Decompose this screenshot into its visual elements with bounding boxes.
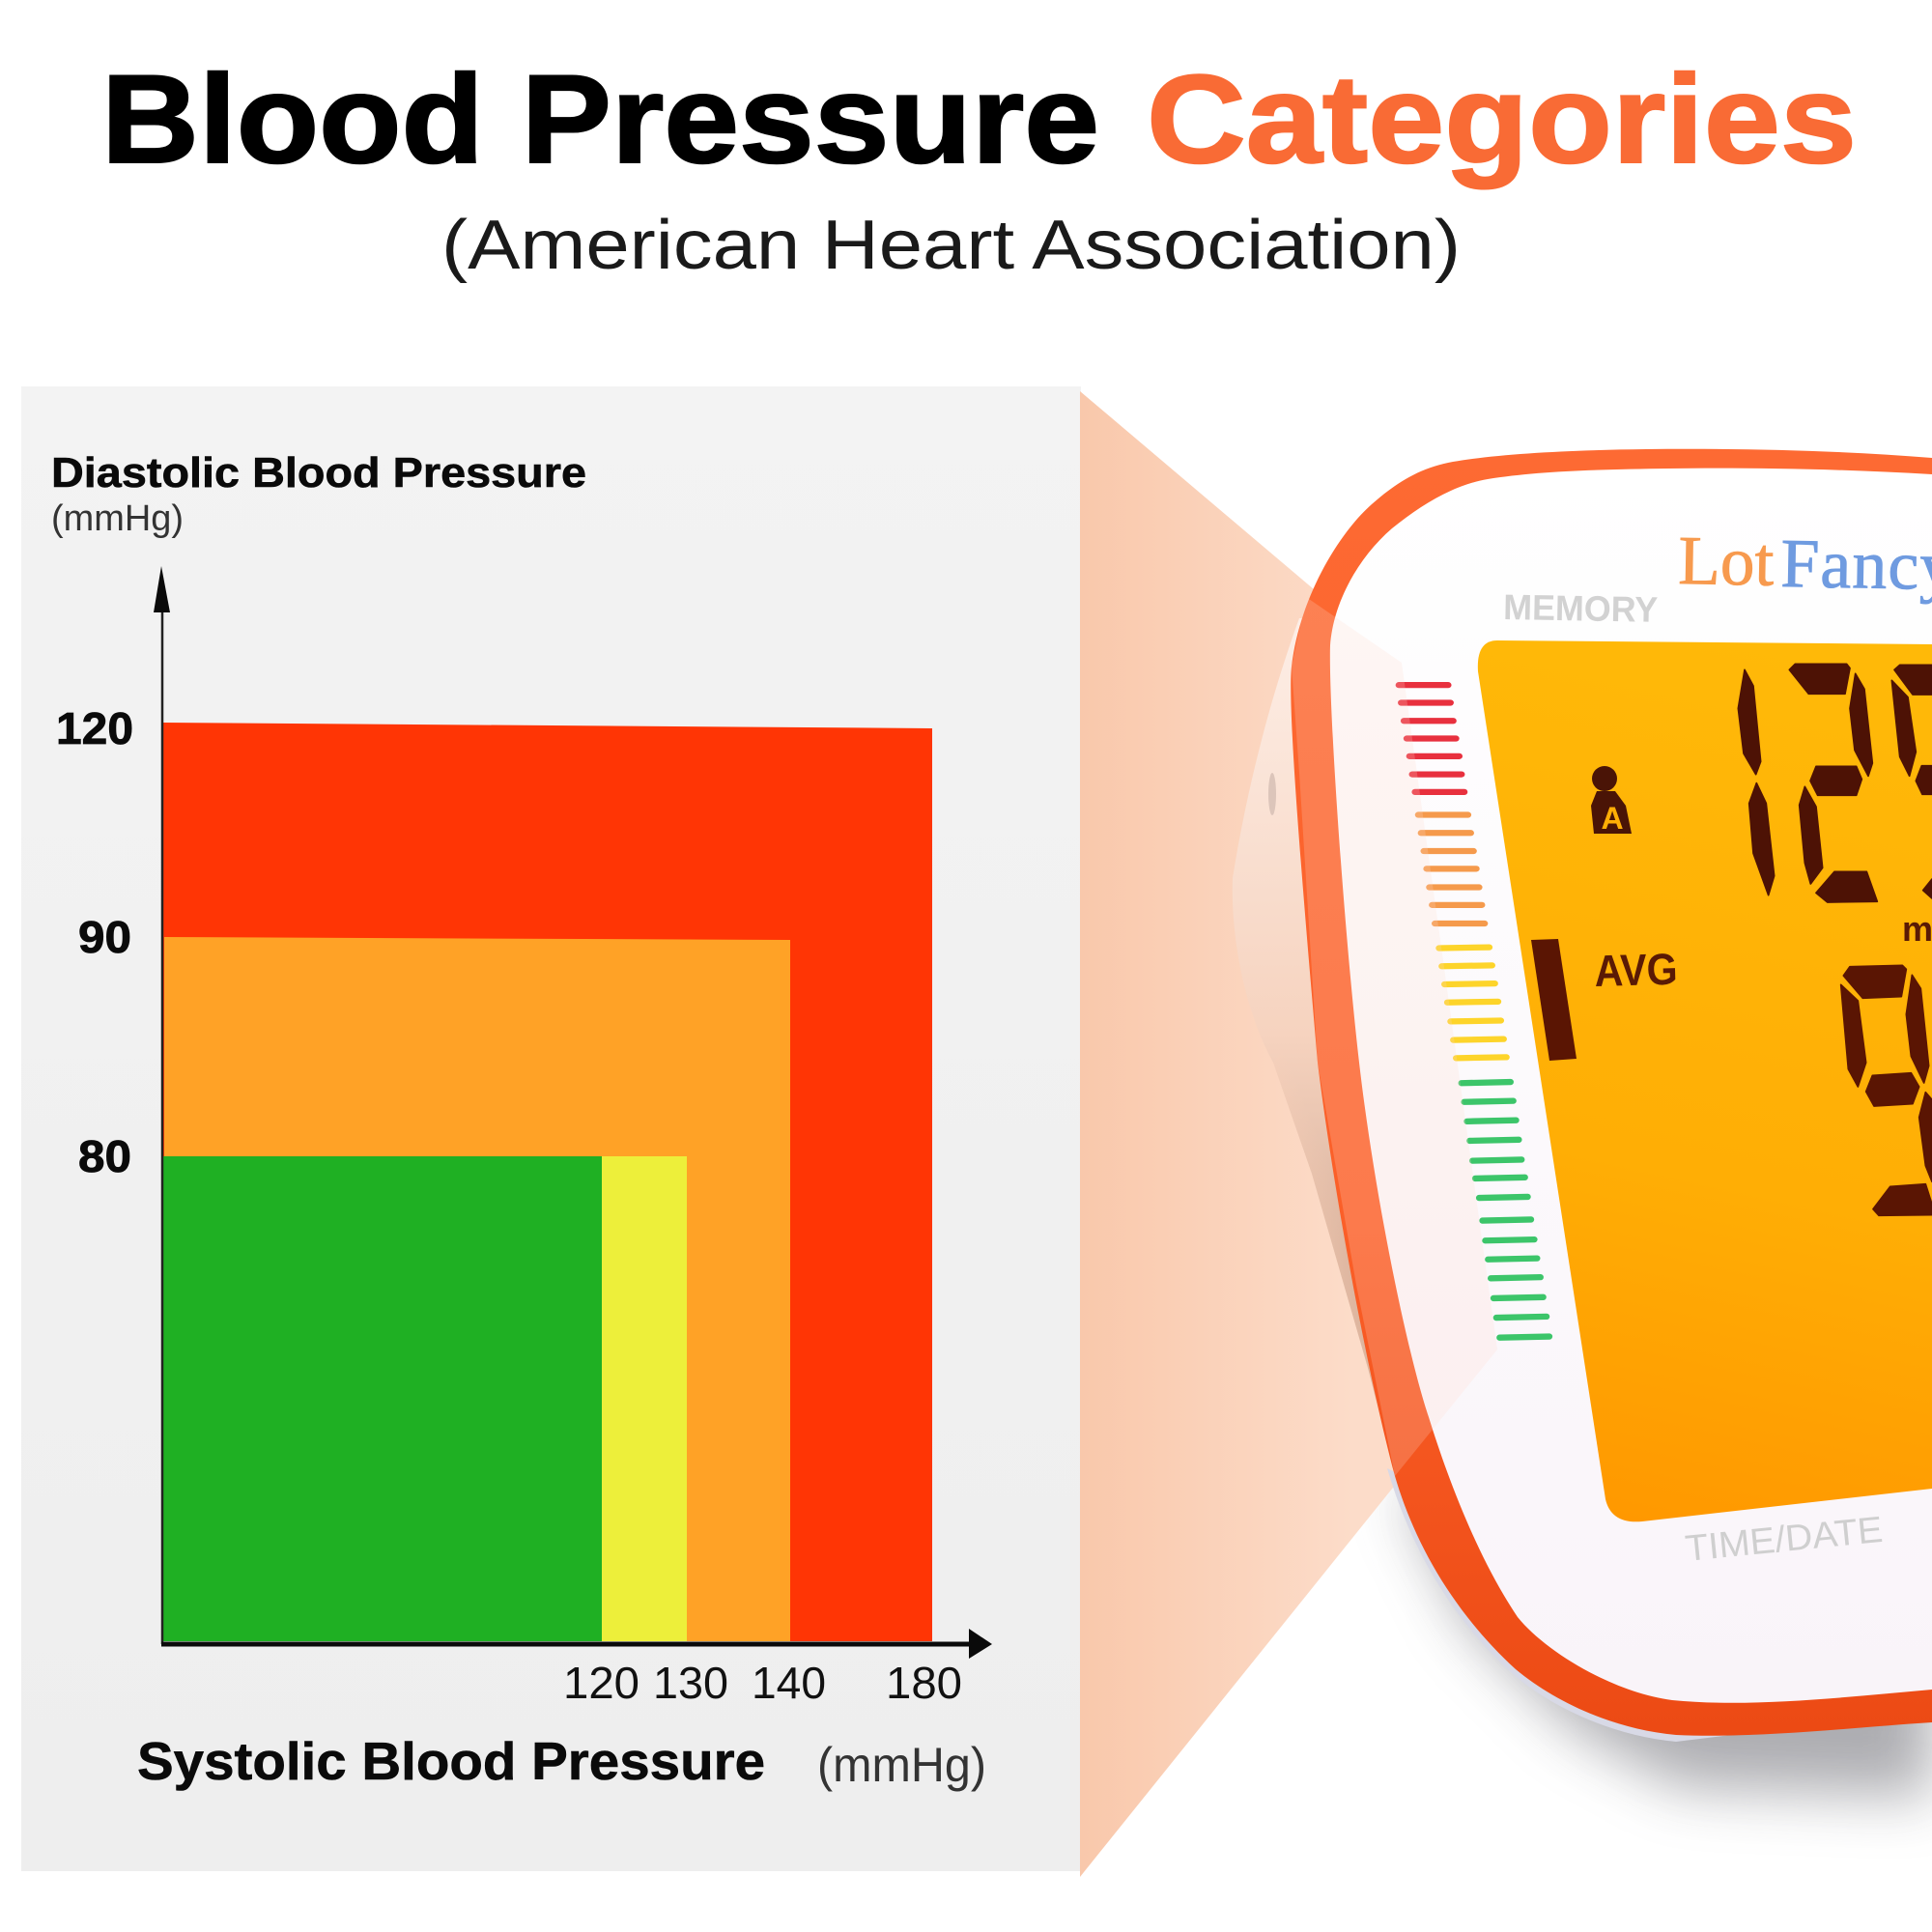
x axis label: Systolic Blood Pressure <box>137 1731 765 1791</box>
systolic digits <box>1738 664 1932 902</box>
icon: user A <box>1591 766 1632 836</box>
y axis ticks: 90 <box>78 912 131 962</box>
zone: hypertensive crisis red <box>162 723 932 1641</box>
diastolic digits <box>1841 965 1932 1215</box>
avg bar indicator <box>1531 939 1577 1061</box>
x axis arrow <box>161 1629 992 1659</box>
zone: elevated yellow <box>602 1156 687 1641</box>
x axis ticks: 140 <box>752 1658 826 1708</box>
x axis ticks: 180 <box>886 1658 962 1708</box>
lcd screen <box>1478 640 1932 1521</box>
brand logo <box>1678 522 1932 605</box>
title: Blood Pressure <box>101 48 1099 189</box>
device side body <box>1233 618 1449 1546</box>
y axis label <box>51 449 586 539</box>
x axis ticks: 120 <box>563 1658 639 1708</box>
y axis label: Diastolic Blood Pressure <box>51 449 586 497</box>
y axis arrow <box>154 566 170 1644</box>
zone: hypertension orange <box>164 937 790 1641</box>
blood pressure monitor device <box>1233 449 1932 1742</box>
gauge: yellow bars <box>1439 948 1506 1058</box>
callout beam <box>1080 391 1401 1877</box>
avg label: AVG <box>1594 944 1678 996</box>
y axis ticks <box>56 703 133 1181</box>
device orange bezel <box>1291 449 1932 1736</box>
gauge: red bars <box>1399 685 1464 792</box>
x axis ticks: 130 <box>653 1658 728 1708</box>
brand logo: Lot <box>1678 522 1775 601</box>
gauge: orange bars <box>1418 815 1485 923</box>
icon: user A: A <box>1601 801 1624 836</box>
beam overlay on device <box>1292 597 1497 1476</box>
device white face <box>1330 469 1932 1703</box>
panel: chart background <box>21 386 1081 1871</box>
x axis label: (mmHg) <box>817 1738 986 1792</box>
y axis ticks: 120 <box>56 703 133 753</box>
device base strip <box>1387 1468 1739 1742</box>
y axis ticks: 80 <box>78 1131 131 1181</box>
gauge: green bars <box>1462 1082 1549 1338</box>
zone: normal green <box>162 1156 602 1641</box>
subtitle: (American Heart Association) <box>441 207 1461 284</box>
time date label: TIME/DATE <box>1684 1510 1885 1570</box>
y axis label: (mmHg) <box>51 498 184 539</box>
title <box>101 48 1857 189</box>
title: Categories <box>1147 48 1857 189</box>
memory label: MEMORY <box>1503 587 1659 630</box>
x axis ticks <box>563 1658 962 1708</box>
chart: blood pressure category zones <box>162 723 932 1641</box>
device shadow <box>1401 1488 1932 1797</box>
